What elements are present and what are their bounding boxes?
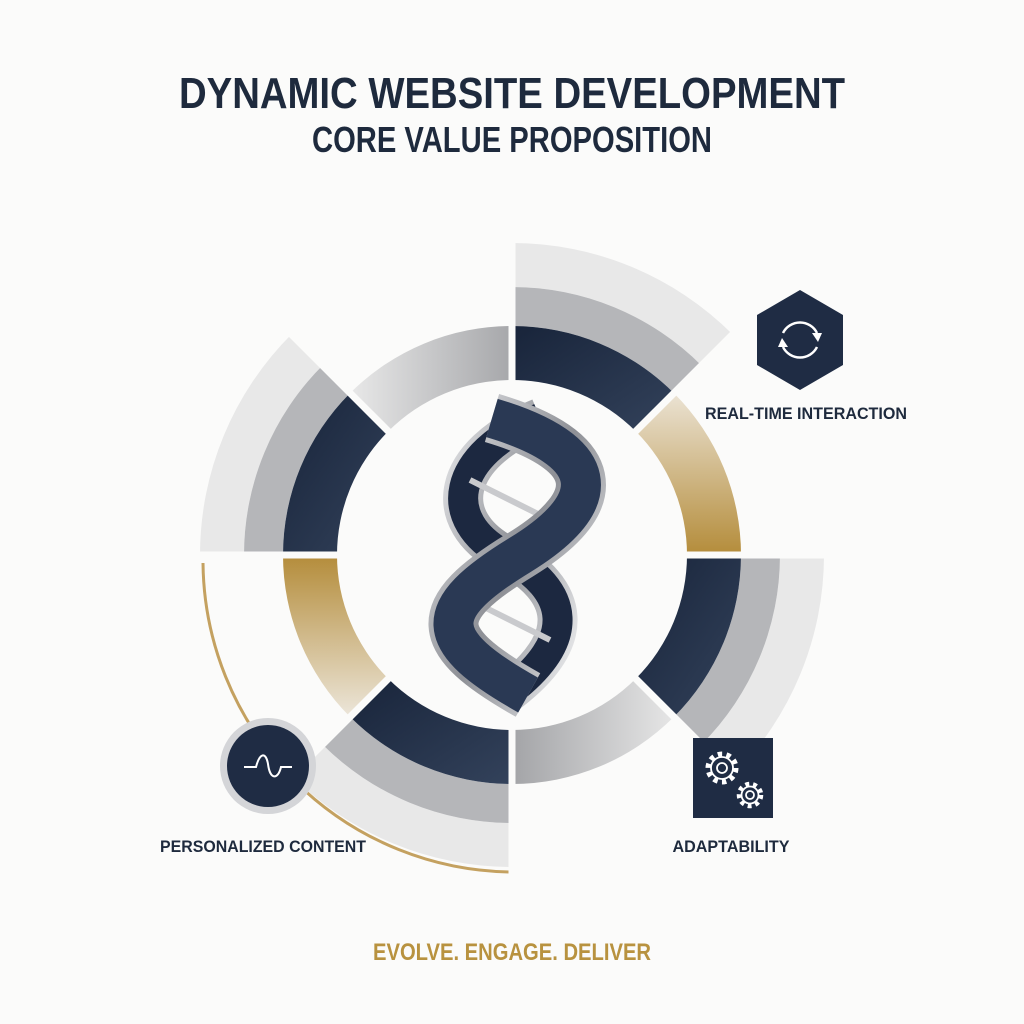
- icon: adaptability gears: [693, 738, 773, 818]
- subtitle: CORE VALUE PROPOSITION: [312, 119, 712, 160]
- extension: bottom: [291, 717, 512, 867]
- inner ring segments: [283, 326, 741, 784]
- gold arc: [203, 563, 512, 872]
- extension: top-right: [512, 243, 733, 393]
- footer tagline: EVOLVE. ENGAGE. DELIVER: [373, 939, 651, 966]
- icon: real-time interaction hexagon: [757, 290, 843, 390]
- label: personalized content: PERSONALIZED CONTENT: [160, 837, 367, 856]
- central helix: [453, 418, 581, 695]
- extension: left: [200, 334, 350, 555]
- title: DYNAMIC WEBSITE DEVELOPMENT: [179, 69, 845, 118]
- icon: personalized content circle: [220, 718, 316, 814]
- label: adaptability: ADAPTABILITY: [672, 837, 790, 856]
- ring diagram: [190, 220, 835, 880]
- label: real-time interaction: REAL-TIME INTERACTION: [705, 404, 907, 423]
- extension: right: [674, 555, 824, 776]
